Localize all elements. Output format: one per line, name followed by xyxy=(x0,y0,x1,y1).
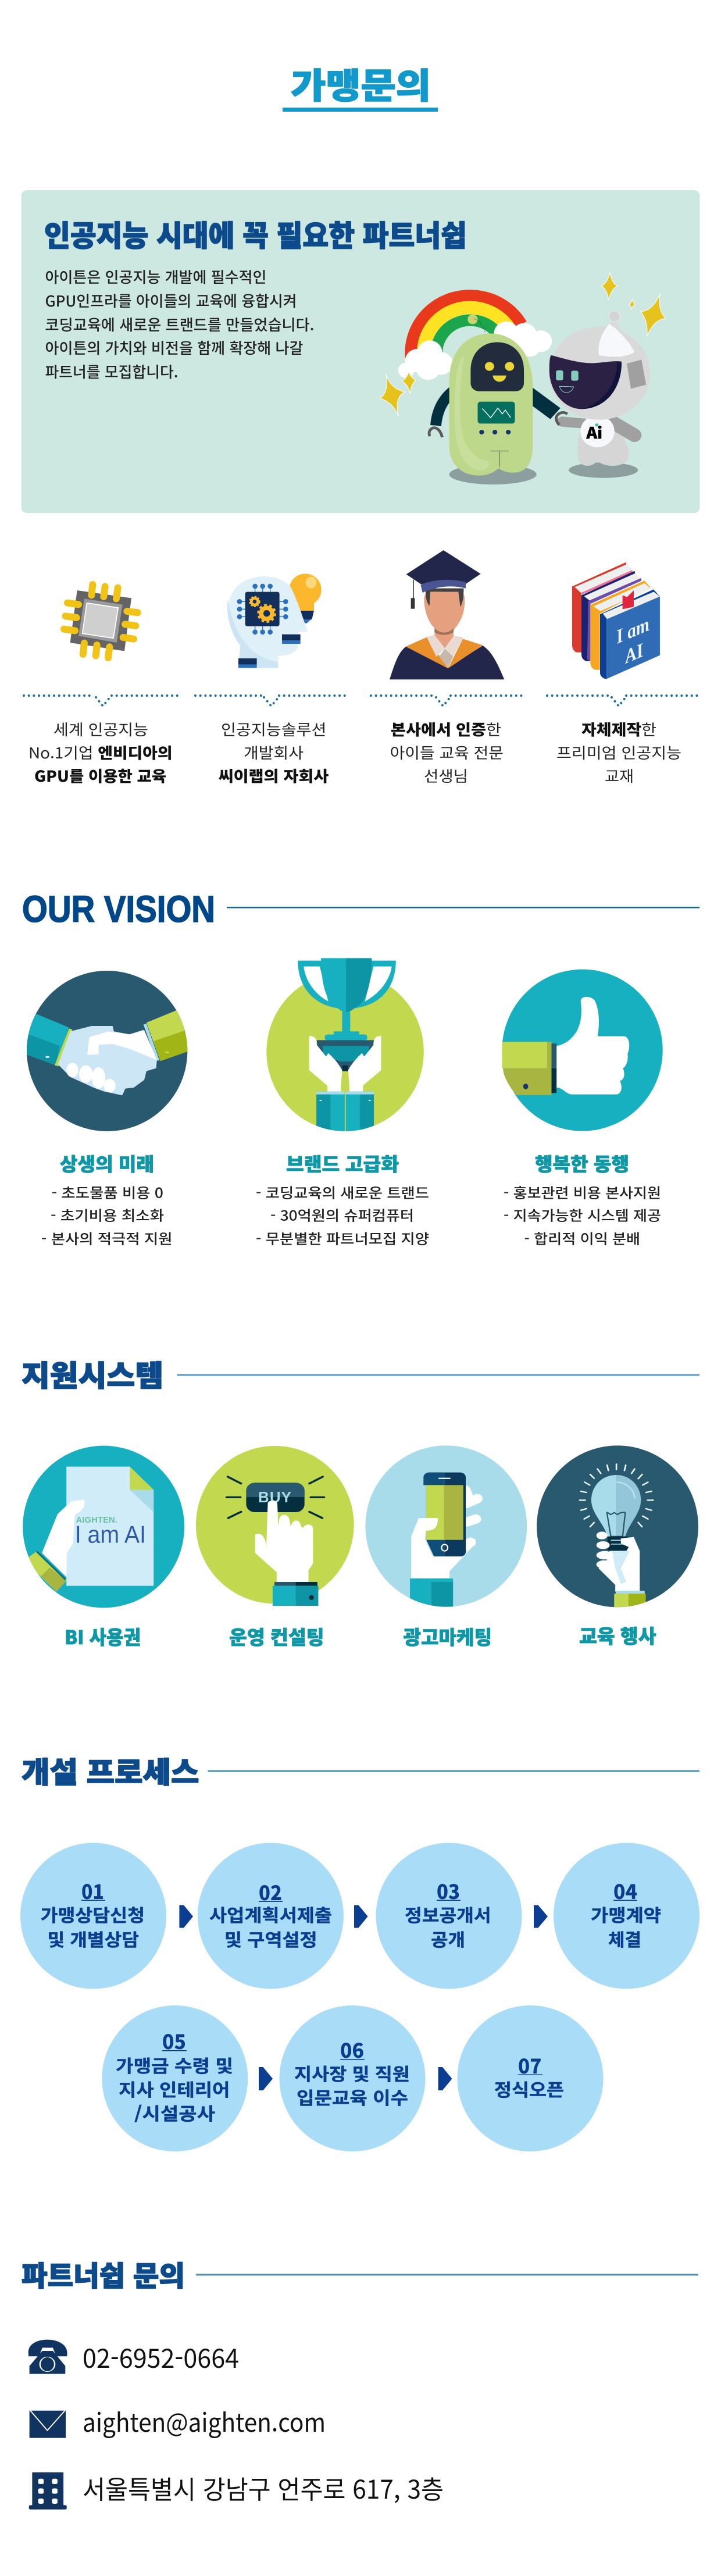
process step 06: 지사장 및 직원 xyxy=(294,2060,410,2086)
book cover title xyxy=(614,614,651,668)
process step 01 xyxy=(20,1843,166,1989)
process step 07: 07 xyxy=(518,2051,542,2079)
heading: opening process xyxy=(22,1750,699,1791)
illustration: robot and astronaut with rainbow xyxy=(380,272,666,484)
feature text: NVIDIA GPU: GPU를 이용한 교육 xyxy=(34,765,166,786)
feature text: certified teachers xyxy=(390,718,504,786)
contact: address: 서울특별시 강남구 언주로 617, 3층 xyxy=(83,2469,444,2506)
icon: buy button xyxy=(196,1446,354,1606)
process step 04 xyxy=(554,1843,699,1989)
vision text: happy companion: - 지속가능한 시스템 제공 xyxy=(504,1204,661,1225)
vision text: shared future: - 초도물품 비용 0 xyxy=(52,1182,163,1202)
feature text: textbook xyxy=(556,718,681,786)
vision text: brand premium: - 코딩교육의 새로운 트랜드 xyxy=(256,1182,429,1202)
icon: AI head with bulb xyxy=(227,573,322,668)
heading: support system: 지원시스템 xyxy=(22,1353,163,1395)
vision text: happy companion: - 합리적 이익 분배 xyxy=(524,1227,640,1248)
arrow xyxy=(179,1905,193,1928)
process step 06: 06 xyxy=(340,2035,364,2064)
support label: consulting: 운영 컨설팅 xyxy=(229,1622,324,1650)
process step 04: 체결 xyxy=(608,1926,641,1951)
icon: I am AI books xyxy=(572,562,660,679)
icon: building xyxy=(29,2472,67,2510)
dotted pointers xyxy=(24,696,701,706)
heading: opening process: 개설 프로세스 xyxy=(22,1750,199,1791)
feature text: developer: 씨이랩의 자회사 xyxy=(219,765,329,786)
process step 06 xyxy=(279,2005,426,2151)
contact: phone number: 02-6952-0664 xyxy=(83,2338,239,2375)
feature text: certified teachers: 본사에서 인증 한 xyxy=(391,718,501,740)
book cover title: I am xyxy=(614,614,651,649)
heading: support system xyxy=(22,1353,699,1395)
feature text: developer xyxy=(219,718,329,786)
process step 02 xyxy=(198,1843,344,1989)
icon: education light bulb xyxy=(537,1445,698,1608)
vision text: shared future: - 본사의 적극적 지원 xyxy=(41,1227,172,1248)
process step 05: 가맹금 수령 및 xyxy=(116,2052,233,2078)
panel body text: GPU인프라를 아이들의 교육에 융합시켜 xyxy=(45,290,297,311)
feature text: textbook: 자체제작 한 xyxy=(581,718,656,740)
process step 01: 01 xyxy=(81,1876,104,1905)
vision text: brand premium: 브랜드 고급화 xyxy=(286,1150,399,1177)
process step 03: 공개 xyxy=(431,1926,465,1951)
heading: partnership inquiry: 파트너쉽 문의 xyxy=(22,2253,185,2294)
icon: BI licence document xyxy=(23,1446,184,1608)
vision text: brand premium: - 30억원의 슈퍼컴퓨터 xyxy=(270,1204,414,1225)
process step 01: 및 개별상담 xyxy=(48,1926,139,1951)
process step 04: 가맹계약 xyxy=(591,1901,661,1927)
BI logo text: AIGHTEN. xyxy=(76,1515,117,1525)
vision text: shared future: 상생의 미래 xyxy=(60,1150,154,1177)
feature text: certified teachers: 선생님 xyxy=(424,765,468,786)
panel: partnership intro xyxy=(21,190,700,513)
process step 03: 03 xyxy=(437,1876,460,1905)
panel body text: 아이튼은 인공지능 개발에 필수적인 xyxy=(45,266,266,287)
icon: buy button: BUY xyxy=(258,1488,291,1506)
icon: thumbs up xyxy=(502,970,663,1131)
feature text: NVIDIA GPU: No.1기업 엔비디아의 xyxy=(28,742,172,763)
process step 02: 및 구역설정 xyxy=(224,1926,317,1951)
process step 03 xyxy=(376,1843,522,1989)
process step 05: 05 xyxy=(162,2026,186,2055)
feature text: textbook: 프리미엄 인공지능 xyxy=(556,742,681,763)
panel body text xyxy=(45,266,314,382)
vision text: happy companion: 행복한 동행 xyxy=(535,1150,629,1177)
process step 03: 정보공개서 xyxy=(405,1901,491,1927)
book cover title: AI xyxy=(622,639,645,668)
process step 05 xyxy=(102,2005,248,2151)
vision text: happy companion: - 홍보관련 비용 본사지원 xyxy=(504,1182,661,1202)
icon: AI chip xyxy=(64,585,138,658)
support label: BI licence: BI 사용권 xyxy=(65,1622,141,1650)
vision text: brand premium: - 무분별한 파트너모집 지양 xyxy=(256,1227,429,1248)
process step 07: 정식오픈 xyxy=(494,2076,564,2101)
vision text: shared future xyxy=(41,1150,172,1248)
feature text: certified teachers: 아이들 교육 전문 xyxy=(390,742,504,763)
support label: marketing: 광고마케팅 xyxy=(404,1622,492,1650)
feature text: developer: 인공지능솔루션 xyxy=(221,718,327,740)
arrow xyxy=(534,1905,548,1928)
process step 02: 02 xyxy=(259,1877,282,1906)
process step 07 xyxy=(457,2005,604,2151)
arrow xyxy=(438,2067,452,2090)
process step 05: /시설공사 xyxy=(134,2100,215,2125)
vision text: happy companion xyxy=(504,1150,661,1248)
vision text: shared future: - 초기비용 최소화 xyxy=(51,1204,164,1225)
icon: phone marketing xyxy=(365,1445,527,1608)
feature text: NVIDIA GPU xyxy=(28,718,172,786)
heading: OUR VISION: OUR VISION xyxy=(22,888,215,930)
contact: email: aighten@aighten.com xyxy=(83,2402,326,2439)
process step 02: 사업계획서제출 xyxy=(209,1901,332,1927)
feature text: textbook: 교재 xyxy=(605,765,634,786)
arrow xyxy=(354,1905,368,1928)
feature text: NVIDIA GPU: 세계 인공지능 xyxy=(53,718,148,740)
vision text: brand premium xyxy=(256,1150,429,1248)
title: 가맹문의 xyxy=(291,58,431,109)
panel heading: 인공지능 시대에 꼭 필요한 파트너쉽 xyxy=(44,213,467,255)
icon: telephone xyxy=(28,2340,67,2374)
icon: graduate xyxy=(390,550,504,679)
feature text: developer: 개발회사 xyxy=(244,742,304,763)
illustration: robot and astronaut with rainbow: Ai xyxy=(586,421,602,443)
panel body text: 파트너를 모집합니다. xyxy=(45,361,178,382)
icon: trophy in hands xyxy=(266,958,424,1132)
icon: handshake xyxy=(22,971,195,1131)
process step 05: 지사 인테리어 xyxy=(119,2076,230,2101)
arrow xyxy=(259,2067,273,2090)
BI logo text: I am AI xyxy=(75,1520,146,1548)
process step 06: 입문교육 이수 xyxy=(297,2084,408,2110)
heading: partnership inquiry xyxy=(22,2253,698,2294)
process step 04: 04 xyxy=(613,1876,637,1905)
icon: envelope xyxy=(30,2411,66,2438)
process step 01: 가맹상담신청 xyxy=(41,1901,145,1927)
panel body text: 코딩교육에 새로운 트랜드를 만들었습니다. xyxy=(45,313,314,335)
support label: education event: 교육 행사 xyxy=(579,1621,656,1649)
panel body text: 아이튼의 가치와 비전을 함께 확장해 나갈 xyxy=(45,337,304,358)
